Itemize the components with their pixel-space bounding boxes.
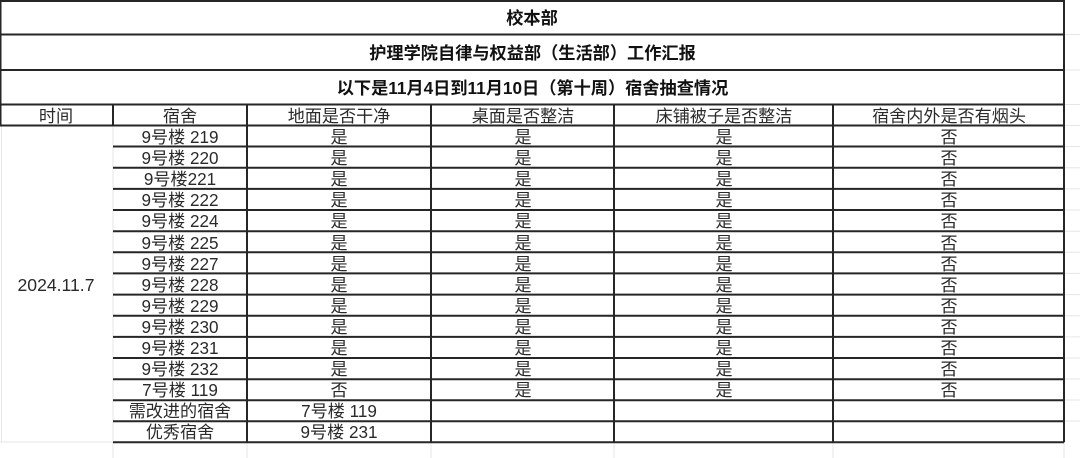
column: desk tidy: 是 [514,360,532,379]
column: bedding tidy: 是 [715,276,733,295]
column: floor clean: 是 [330,276,348,295]
column: dormitory numbers: 9号楼 219 [142,128,218,147]
column: desk tidy: 是 [514,381,532,400]
table column headers: 宿舍内外是否有烟头 [872,107,1026,126]
column: bedding tidy: 是 [715,170,733,189]
column: bedding tidy [715,128,733,400]
table column headers: 宿舍 [163,107,197,126]
column: cigarette butts: 否 [940,234,958,253]
date cell: 2024.11.7 [18,275,94,295]
column: dormitory numbers [129,128,231,442]
column: desk tidy: 是 [514,339,532,358]
column: dormitory numbers: 9号楼 231 [142,339,218,358]
column: cigarette butts: 否 [940,149,958,168]
column: floor clean: 是 [330,149,348,168]
column: desk tidy [514,128,532,400]
column: floor clean [301,128,377,442]
column: bedding tidy: 是 [715,128,733,147]
table column headers: 时间 [39,107,73,126]
column: bedding tidy: 是 [715,381,733,400]
column: dormitory numbers: 9号楼 220 [142,149,218,168]
heading: department work report: 护理学院自律与权益部（生活部）工作汇报 [369,43,696,63]
column: dormitory numbers: 优秀宿舍 [146,423,214,442]
column: floor clean: 是 [330,360,348,379]
heading: inspection period: 以下是11月4日到11月10日（第十周）宿舍抽查情况 [337,78,728,98]
column: dormitory numbers: 9号楼 222 [142,191,218,210]
column: floor clean: 是 [330,339,348,358]
column: dormitory numbers: 9号楼 232 [142,360,218,379]
column: bedding tidy: 是 [715,149,733,168]
column: dormitory numbers: 7号楼 119 [142,381,218,400]
table column headers: 地面是否干净 [288,107,390,126]
column: floor clean: 7号楼 119 [301,402,377,421]
column: bedding tidy: 是 [715,212,733,231]
column: desk tidy: 是 [514,191,532,210]
column: dormitory numbers: 9号楼 229 [142,297,218,316]
column: bedding tidy: 是 [715,360,733,379]
column: cigarette butts: 否 [940,212,958,231]
column: cigarette butts: 否 [940,318,958,337]
column: floor clean: 是 [330,255,348,274]
column: desk tidy: 是 [514,276,532,295]
column: desk tidy: 是 [514,212,532,231]
table column headers: 床铺被子是否整洁 [656,107,792,126]
column: floor clean: 是 [330,128,348,147]
column: bedding tidy: 是 [715,191,733,210]
column: desk tidy: 是 [514,255,532,274]
column: dormitory numbers: 9号楼221 [144,170,216,189]
column: bedding tidy: 是 [715,318,733,337]
column: cigarette butts: 否 [940,276,958,295]
column: dormitory numbers: 9号楼 228 [142,276,218,295]
column: floor clean: 是 [330,170,348,189]
column: cigarette butts: 否 [940,381,958,400]
column: floor clean: 否 [330,381,348,400]
column: floor clean: 是 [330,212,348,231]
column: floor clean: 9号楼 231 [301,423,377,442]
column: cigarette butts: 否 [940,191,958,210]
column: floor clean: 是 [330,191,348,210]
column: bedding tidy: 是 [715,339,733,358]
column: cigarette butts [940,128,958,400]
column: floor clean: 是 [330,318,348,337]
column: floor clean: 是 [330,297,348,316]
column: bedding tidy: 是 [715,234,733,253]
column: desk tidy: 是 [514,318,532,337]
table column headers: 桌面是否整洁 [472,107,574,126]
column: desk tidy: 是 [514,128,532,147]
column: cigarette butts: 否 [940,360,958,379]
column: floor clean: 是 [330,234,348,253]
column: cigarette butts: 否 [940,297,958,316]
column: dormitory numbers: 9号楼 230 [142,318,218,337]
title: school headquarters: 校本部 [506,8,558,28]
column: cigarette butts: 否 [940,128,958,147]
column: dormitory numbers: 9号楼 227 [142,255,218,274]
column: dormitory numbers: 需改进的宿舍 [129,402,231,421]
column: cigarette butts: 否 [940,339,958,358]
table column headers [39,107,1026,126]
column: desk tidy: 是 [514,170,532,189]
column: dormitory numbers: 9号楼 225 [142,234,218,253]
column: cigarette butts: 否 [940,170,958,189]
column: bedding tidy: 是 [715,255,733,274]
column: desk tidy: 是 [514,149,532,168]
column: cigarette butts: 否 [940,255,958,274]
column: dormitory numbers: 9号楼 224 [142,212,218,231]
column: bedding tidy: 是 [715,297,733,316]
column: desk tidy: 是 [514,234,532,253]
column: desk tidy: 是 [514,297,532,316]
